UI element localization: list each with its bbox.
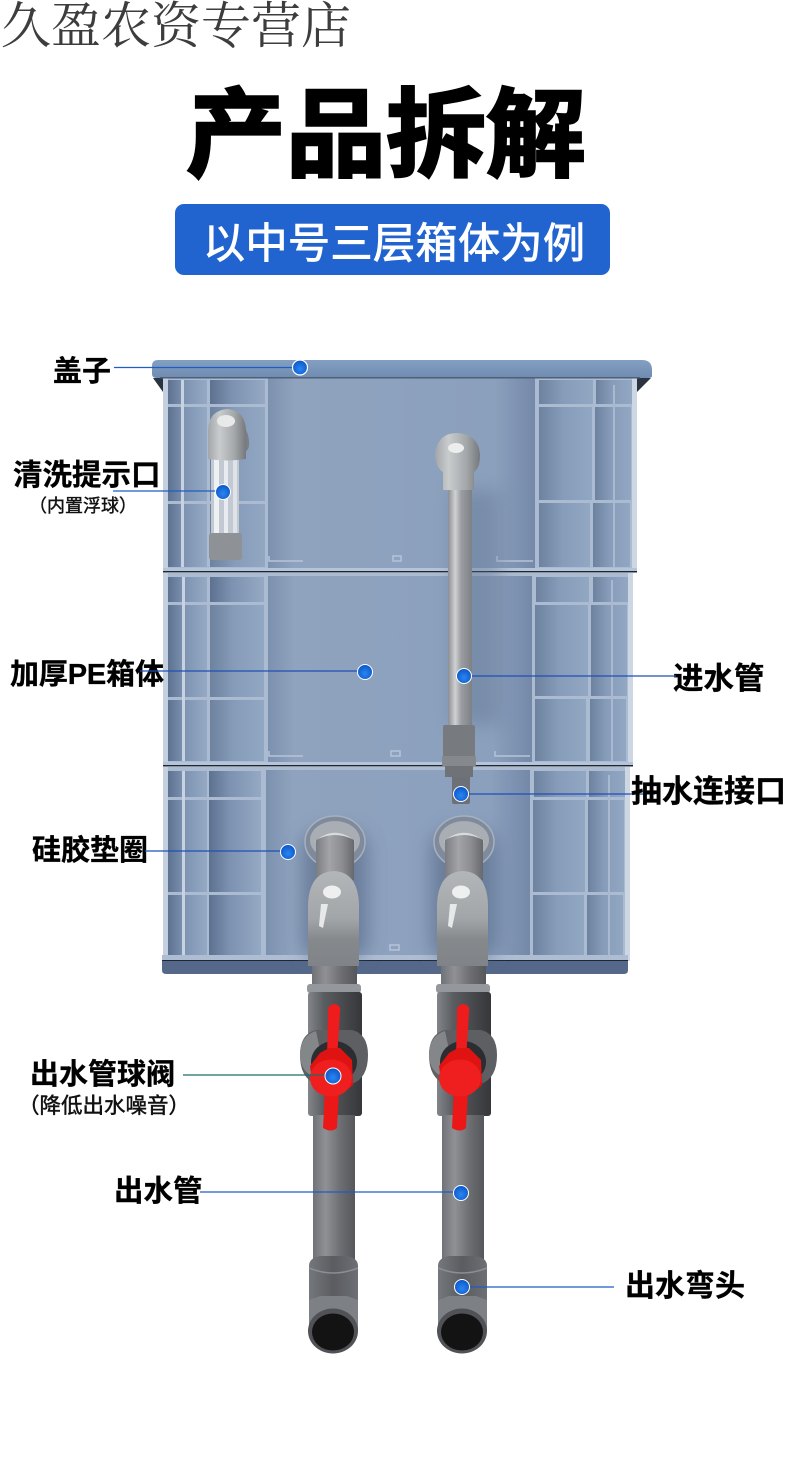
label: cleaning indicator bbox=[13, 459, 230, 516]
subtitle badge: 以中号三层箱体为例 bbox=[203, 220, 585, 267]
label: ball valve bbox=[18, 1058, 341, 1118]
label: pump connector: 抽水连接口 bbox=[631, 774, 786, 809]
outlet assembly: left bbox=[300, 816, 368, 1354]
title: 产品拆解 bbox=[186, 81, 586, 190]
crate: top layer bbox=[163, 378, 637, 572]
label: inlet pipe bbox=[456, 662, 764, 696]
label: outlet pipe bbox=[114, 1175, 468, 1208]
label: inlet pipe: 进水管 bbox=[673, 662, 764, 696]
crate lid bbox=[152, 360, 652, 392]
label: ball valve: （降低出水噪音） bbox=[18, 1094, 190, 1118]
crate: bottom layer bbox=[162, 767, 630, 974]
label: silicone gasket: 硅胶垫圈 bbox=[32, 834, 148, 867]
product diagram: stacked crates with lid bbox=[152, 360, 652, 974]
label: cleaning indicator: （内置浮球） bbox=[29, 496, 137, 516]
label: pump connector bbox=[454, 774, 786, 809]
subtitle badge bbox=[175, 204, 610, 275]
crate: middle layer bbox=[163, 573, 633, 766]
label: outlet elbow bbox=[454, 1270, 745, 1303]
inlet pipe bbox=[435, 433, 500, 804]
label: PE crate: 加厚PE箱体 bbox=[10, 658, 164, 691]
label: cleaning indicator: 清洗提示口 bbox=[13, 459, 161, 492]
label: silicone gasket bbox=[32, 834, 296, 867]
label: lid bbox=[53, 355, 308, 388]
float indicator tube bbox=[208, 409, 249, 560]
label: lid: 盖子 bbox=[53, 355, 111, 388]
label: outlet elbow: 出水弯头 bbox=[625, 1270, 745, 1303]
label: ball valve: 出水管球阀 bbox=[30, 1058, 175, 1091]
outlet assembly: right bbox=[429, 816, 497, 1354]
label: PE crate bbox=[10, 658, 372, 691]
label: outlet pipe: 出水管 bbox=[114, 1175, 203, 1208]
